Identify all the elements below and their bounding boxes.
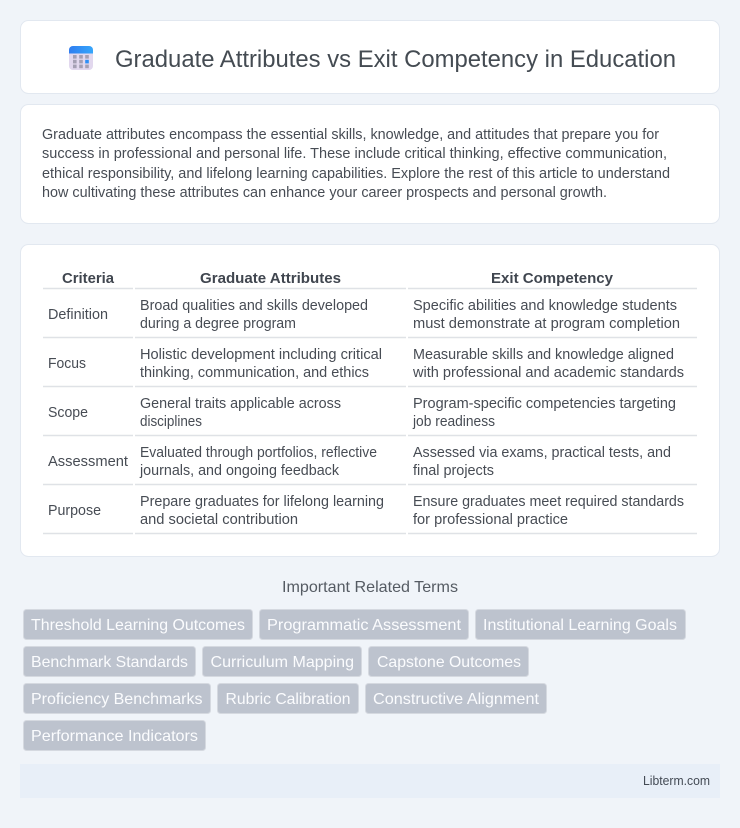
row: definition bbox=[48, 298, 680, 332]
row: purpose: for professional practice bbox=[413, 512, 568, 528]
row: focus bbox=[48, 347, 684, 381]
title: Graduate Attributes vs Exit Competency in Education bbox=[115, 46, 676, 73]
related terms chips: Benchmark Standards bbox=[31, 654, 188, 671]
row: definition: during a degree program bbox=[140, 316, 296, 332]
row: scope bbox=[48, 396, 676, 430]
panel: comparison table bbox=[20, 244, 720, 556]
related terms chips: Proficiency Benchmarks bbox=[31, 691, 202, 708]
row: purpose: and societal contribution bbox=[140, 512, 298, 528]
footer bbox=[20, 764, 720, 798]
related terms chips: Capstone Outcomes bbox=[377, 654, 521, 671]
table header: Criteria bbox=[62, 271, 115, 287]
text block: introduction: how cultivating these attributes can enhance your career prospects and personal growth. bbox=[42, 185, 607, 201]
related terms chips: Curriculum Mapping bbox=[210, 654, 354, 671]
row: scope: job readiness bbox=[412, 414, 495, 430]
text block: introduction: success in professional and personal life. These include critical thinking, effective communication, bbox=[42, 146, 667, 162]
row: assessment: Assessment bbox=[48, 454, 128, 470]
text block: introduction bbox=[42, 127, 670, 201]
row: focus: with professional and academic standards bbox=[412, 365, 684, 381]
row: scope: Scope bbox=[48, 405, 88, 421]
row: assessment bbox=[48, 445, 671, 479]
row: scope: Program-specific competencies targeting bbox=[413, 396, 676, 412]
row: focus: Focus bbox=[48, 356, 86, 372]
row: assessment: journals, and ongoing feedback bbox=[139, 463, 340, 479]
table header: Exit Competency bbox=[491, 271, 613, 287]
row: assessment: final projects bbox=[413, 463, 494, 479]
related terms chips: Rubric Calibration bbox=[226, 691, 350, 708]
related terms chips: Threshold Learning Outcomes bbox=[31, 617, 245, 634]
row: assessment: Assessed via exams, practical tests, and bbox=[413, 445, 671, 461]
footer credit: Libterm.com bbox=[643, 774, 710, 788]
row: definition: Definition bbox=[48, 307, 108, 323]
table header bbox=[62, 271, 613, 287]
icon: calendar bbox=[69, 46, 93, 70]
row: focus: thinking, communication, and ethics bbox=[140, 365, 369, 381]
row: purpose: Purpose bbox=[48, 503, 101, 519]
row: purpose: Ensure graduates meet required standards bbox=[413, 494, 684, 510]
row: definition: Broad qualities and skills developed bbox=[140, 298, 368, 314]
heading: related terms: Important Related Terms bbox=[282, 579, 458, 596]
text block: introduction: ethical responsibility, and lifelong learning capabilities. Explore the rest of this article to understand bbox=[42, 166, 670, 182]
row: definition: Specific abilities and knowledge students bbox=[413, 298, 677, 314]
related terms chips: Constructive Alignment bbox=[373, 691, 540, 708]
row: scope: disciplines bbox=[140, 414, 202, 430]
related terms chips: Programmatic Assessment bbox=[267, 617, 462, 634]
row: scope: General traits applicable across bbox=[140, 396, 341, 412]
row: assessment: Evaluated through portfolios, reflective bbox=[140, 445, 377, 461]
related terms chips bbox=[24, 610, 686, 750]
related terms chips: Performance Indicators bbox=[31, 728, 198, 745]
row: purpose bbox=[48, 494, 684, 528]
related terms chips: Institutional Learning Goals bbox=[483, 617, 677, 634]
panel: header bbox=[20, 20, 720, 94]
panel: introduction bbox=[20, 104, 720, 224]
table header: Graduate Attributes bbox=[200, 271, 341, 287]
row: purpose: Prepare graduates for lifelong learning bbox=[140, 494, 384, 510]
text block: introduction: Graduate attributes encompass the essential skills, knowledge, and attitudes that prepare you for bbox=[42, 127, 659, 143]
row: focus: Holistic development including critical bbox=[140, 347, 382, 363]
row: definition: must demonstrate at program completion bbox=[413, 316, 680, 332]
row: focus: Measurable skills and knowledge aligned bbox=[413, 347, 674, 363]
